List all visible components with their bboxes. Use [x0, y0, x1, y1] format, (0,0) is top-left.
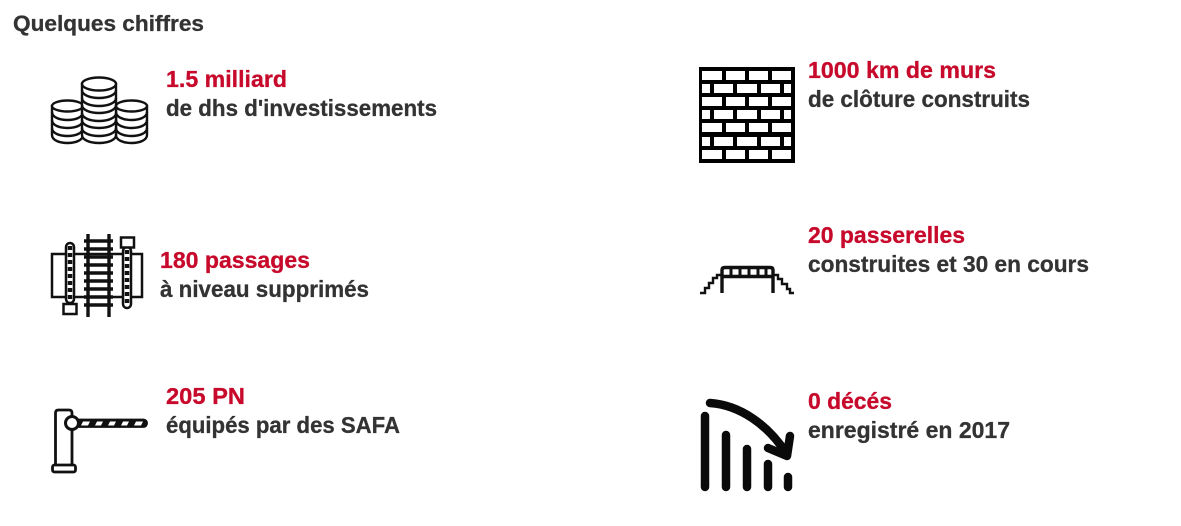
- icon: declining bar chart: [705, 403, 790, 487]
- icon: barrier: [52, 410, 146, 472]
- stat: equipped crossings: 205 PN: [166, 383, 245, 409]
- stat: equipped crossings: [166, 383, 400, 438]
- stat: footbridges: construites et 30 en cours: [808, 251, 1089, 277]
- stat: level crossings removed: 180 passages: [160, 247, 310, 273]
- stat: deaths: enregistré en 2017: [808, 417, 1010, 443]
- stat: investment: de dhs d'investissements: [166, 95, 437, 121]
- stat: fence walls: 1000 km de murs: [808, 57, 996, 83]
- stat: investment: [166, 66, 437, 121]
- stat: footbridges: [808, 222, 1089, 277]
- icon: coin stacks: [52, 78, 147, 143]
- icon: footbridge: [700, 268, 794, 293]
- stat: investment: 1.5 milliard: [166, 66, 287, 92]
- stat: deaths: 0 décés: [808, 388, 892, 414]
- stat: level crossings removed: [160, 247, 369, 302]
- stat: deaths: [808, 388, 1010, 443]
- icon: level crossing tracks: [52, 234, 142, 317]
- stat: equipped crossings: équipés par des SAFA: [166, 412, 400, 438]
- stat: footbridges: 20 passerelles: [808, 222, 965, 248]
- title: Quelques chiffres: [13, 11, 204, 36]
- stat: level crossings removed: à niveau supprimés: [160, 276, 369, 302]
- stat: fence walls: de clôture construits: [808, 86, 1030, 112]
- stat: fence walls: [808, 57, 1030, 112]
- icon: brick wall: [699, 67, 795, 163]
